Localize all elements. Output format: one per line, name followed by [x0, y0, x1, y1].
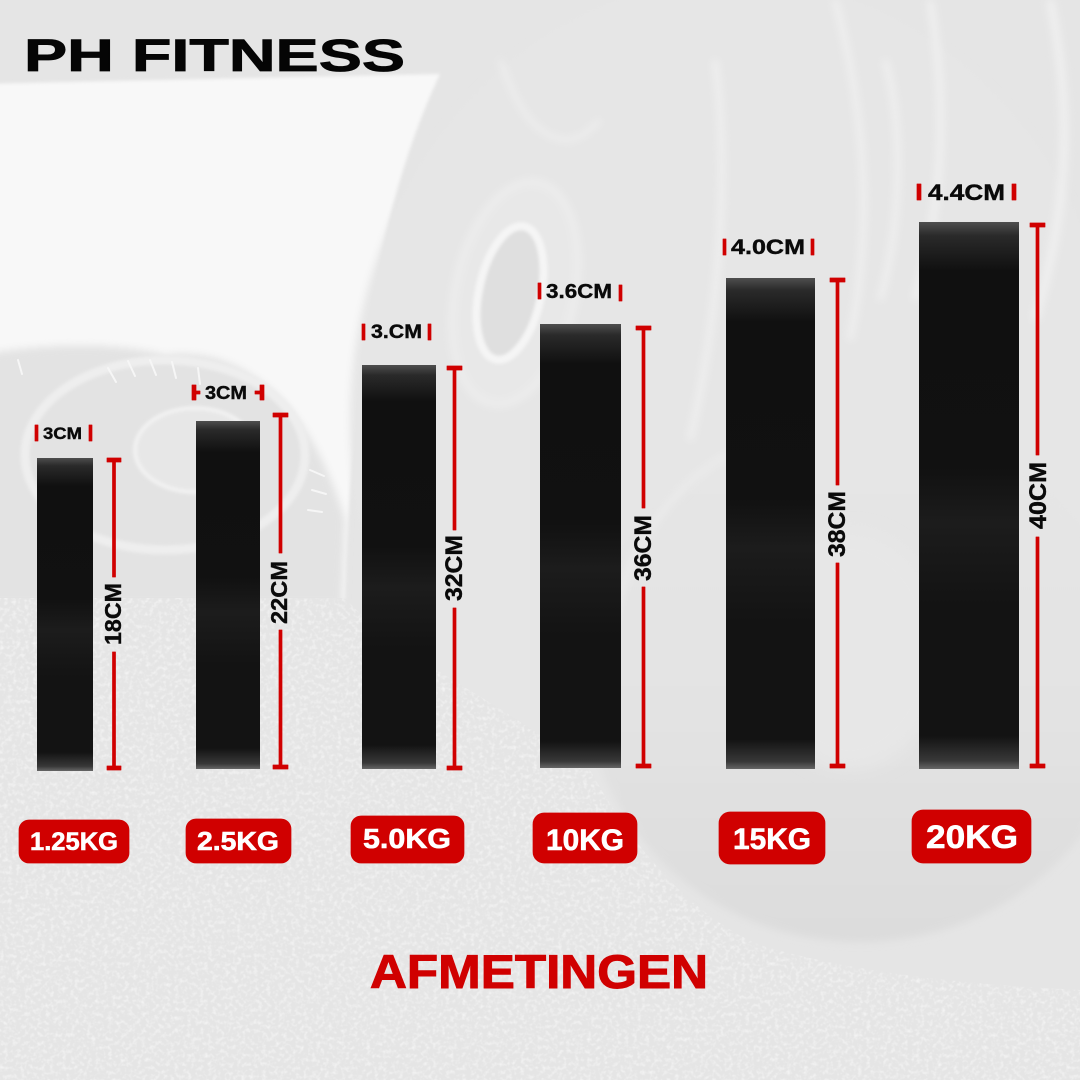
plate column: 1.25KG — [19, 425, 129, 863]
thickness dimension 3CM — [35, 425, 92, 443]
thickness dimension 4.4CM: 4.4CM — [928, 180, 1005, 205]
thickness dimension 3CM: 3CM — [205, 383, 247, 403]
plate column: 15KG — [719, 236, 851, 864]
weight badge 10KG: 10KG — [546, 824, 624, 857]
plate column: 20KG — [912, 180, 1052, 863]
plate side view 10KG — [540, 324, 621, 768]
plate side view 1.25KG — [37, 458, 93, 771]
height dimension 22CM — [266, 413, 292, 769]
height dimension 22CM: 22CM — [266, 561, 292, 624]
thickness dimension 3CM — [192, 383, 264, 403]
plate side view 20KG — [919, 222, 1019, 769]
thickness dimension 3CM: 3CM — [43, 425, 82, 443]
height dimension 40CM — [1025, 223, 1052, 768]
plate column: 2.5KG — [186, 383, 292, 863]
height dimension 38CM: 38CM — [824, 491, 851, 557]
weight badge 5.0KG — [351, 816, 464, 863]
height dimension 32CM: 32CM — [441, 535, 468, 601]
ring around plate hub — [433, 170, 597, 416]
thickness dimension 3.CM — [362, 322, 431, 343]
plate column: 10KG — [533, 281, 657, 863]
weight badge 15KG — [719, 812, 825, 864]
weight badge 2.5KG — [186, 819, 291, 863]
height dimension 18CM — [100, 458, 126, 770]
height dimension 36CM — [630, 326, 657, 768]
logo: PH FITNESS: PH FITNESS — [24, 30, 405, 81]
plate side view 2.5KG — [196, 421, 260, 769]
thickness dimension 3.6CM: 3.6CM — [546, 281, 612, 303]
height dimension 36CM: 36CM — [630, 515, 657, 581]
thickness dimension 4.0CM: 4.0CM — [731, 236, 805, 259]
weight badge 2.5KG: 2.5KG — [197, 826, 279, 856]
weight badge 20KG — [912, 810, 1031, 863]
height dimension 38CM — [824, 278, 851, 768]
plate side view 5.0KG — [362, 365, 436, 769]
weight badge 1.25KG: 1.25KG — [30, 828, 118, 856]
weight badge 10KG — [533, 813, 637, 863]
weight badge 5.0KG: 5.0KG — [363, 823, 451, 854]
weight badge 1.25KG — [19, 820, 129, 863]
height dimension 40CM: 40CM — [1025, 462, 1052, 529]
thickness dimension 3.CM: 3.CM — [371, 322, 422, 343]
plate column: 5.0KG — [351, 322, 468, 863]
weight badge 20KG: 20KG — [926, 819, 1018, 855]
weight badge 15KG: 15KG — [733, 823, 811, 856]
thickness dimension 4.4CM — [917, 180, 1016, 205]
height dimension 18CM: 18CM — [100, 583, 126, 645]
height dimension 32CM — [441, 366, 468, 770]
plate side view 15KG — [726, 278, 815, 769]
thickness dimension 4.0CM — [723, 236, 814, 259]
title: AFMETINGEN: AFMETINGEN — [370, 945, 708, 998]
